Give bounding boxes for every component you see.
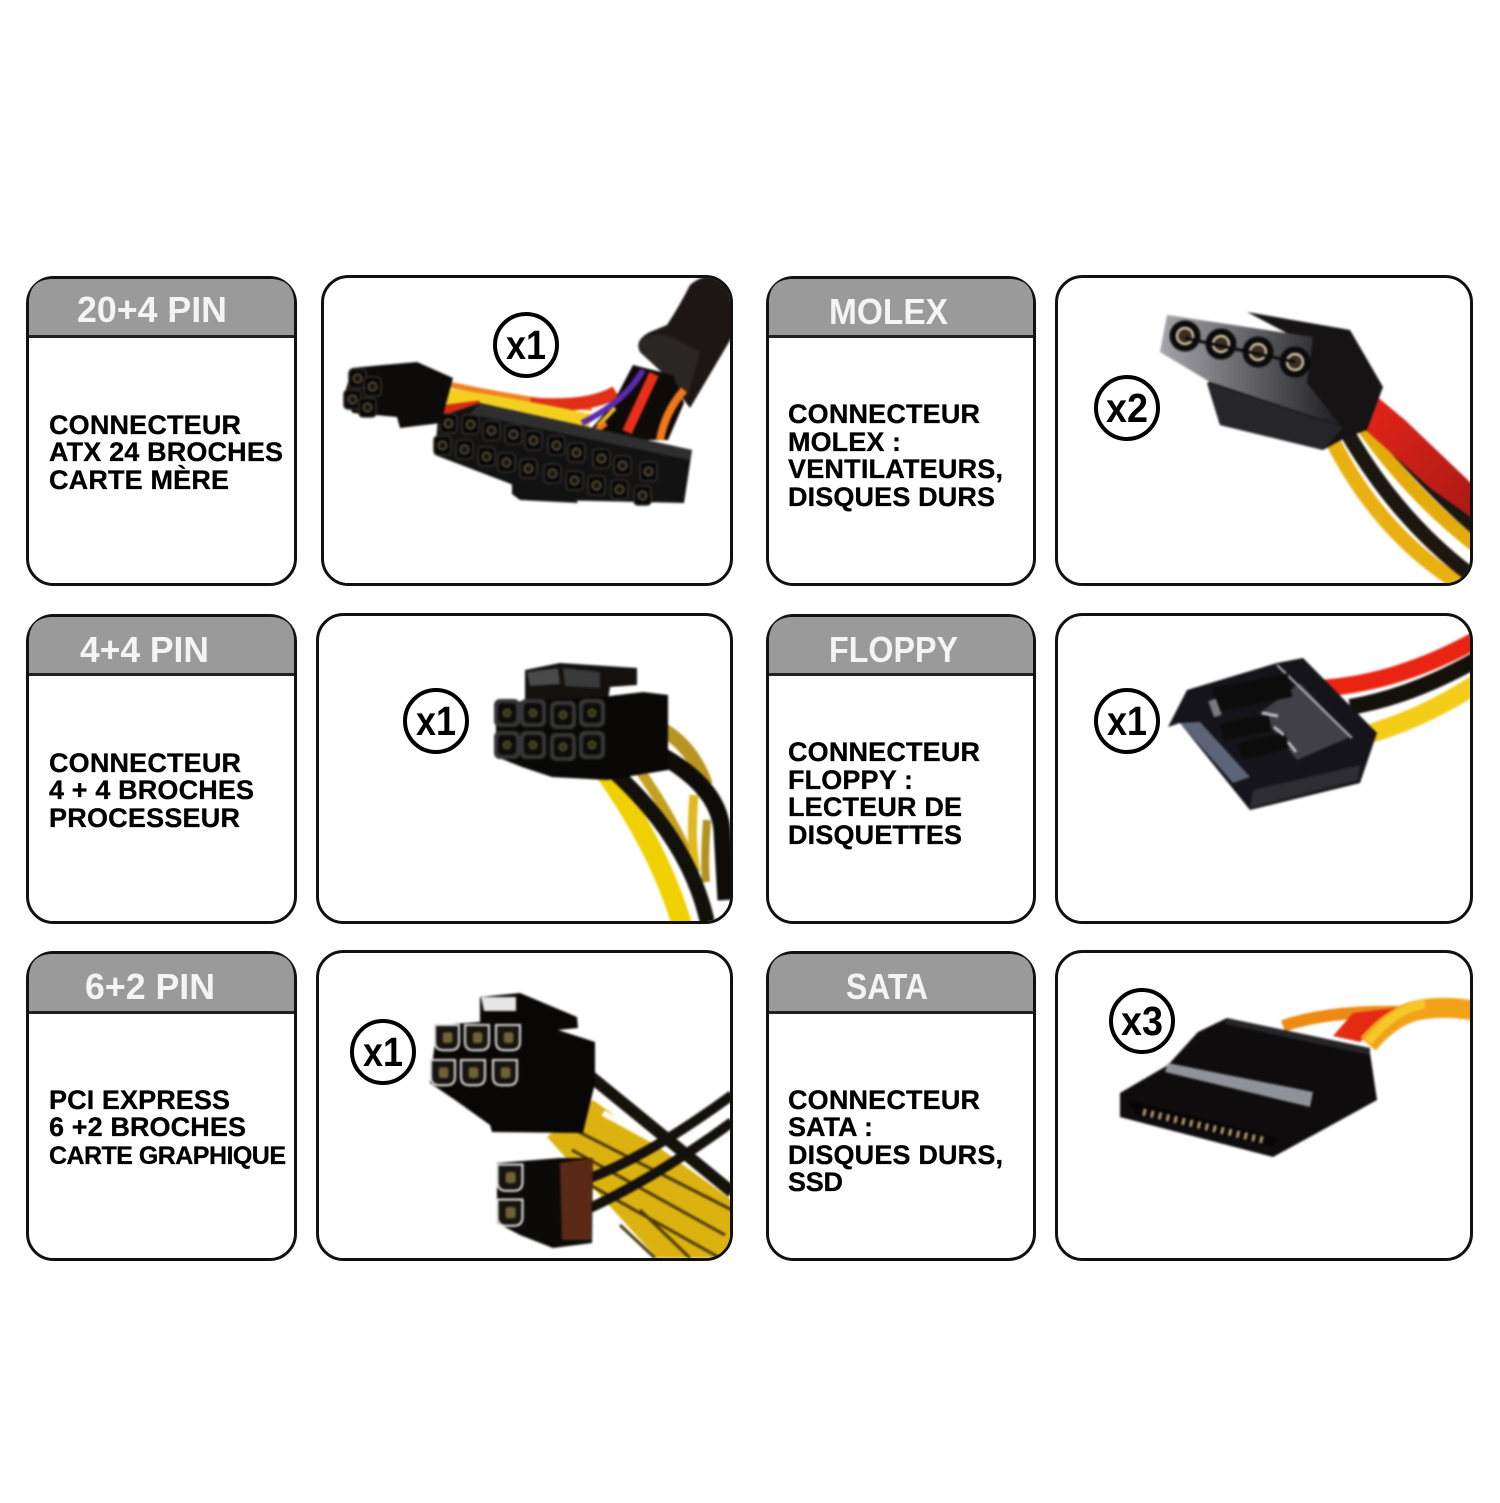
text: ATX 24 description: CONNECTEUR (49, 410, 241, 440)
panel: SATA connector photo (1056, 952, 1476, 1260)
text: SATA description: SSD (788, 1167, 843, 1197)
badge: x2: x2 (1106, 385, 1148, 431)
text: Molex description (788, 399, 1003, 512)
panel: Floppy label (768, 616, 1034, 922)
text: SATA description: CONNECTEUR (788, 1085, 980, 1115)
badge: x1: x1 (1107, 698, 1147, 744)
text: CPU description: 4 + 4 BROCHES (49, 775, 254, 805)
text: PCI Express description: PCI EXPRESS (49, 1085, 230, 1115)
photo: SATA connector (1120, 1004, 1476, 1157)
header: MOLEX: MOLEX (829, 291, 948, 332)
header: 4+4 PIN (29, 617, 294, 676)
text: Molex description: VENTILATEURS, (788, 454, 1003, 484)
badge: x3: x3 (1121, 998, 1163, 1044)
badge: x2 (1096, 377, 1158, 439)
badge: x1 (1096, 690, 1158, 752)
header: FLOPPY: FLOPPY (829, 629, 958, 670)
panel: Molex label (768, 278, 1034, 584)
text: Molex description: MOLEX : (788, 427, 901, 457)
header: MOLEX (769, 279, 1033, 338)
panel: Molex connector photo (1056, 276, 1475, 590)
panel: Floppy connector photo (1056, 614, 1476, 922)
panel: 4+4 pin label (28, 616, 296, 922)
text: PCI Express description: CARTE GRAPHIQUE (49, 1142, 286, 1170)
panel: 20+4 pin connector photo (322, 276, 732, 584)
text: SATA description: SATA : (788, 1112, 873, 1142)
header: FLOPPY (769, 617, 1033, 676)
photo: Molex connector (1160, 312, 1475, 590)
text: PCI Express description (49, 1085, 286, 1170)
badge: x3 (1111, 990, 1173, 1052)
header: 20+4 PIN: 20+4 PIN (77, 289, 227, 330)
text: Floppy description: FLOPPY : (788, 765, 913, 795)
photo: Floppy connector (1168, 640, 1476, 810)
text: Floppy description: DISQUETTES (788, 820, 962, 850)
text: Floppy description (788, 737, 980, 850)
panel: 6+2 pin connector photo (318, 952, 732, 1260)
badge: x1: x1 (363, 1029, 403, 1075)
header: 6+2 PIN: 6+2 PIN (85, 966, 215, 1007)
text: SATA description: DISQUES DURS, (788, 1140, 1003, 1170)
text: Floppy description: LECTEUR DE (788, 792, 962, 822)
badge: x1: x1 (416, 698, 456, 744)
text: ATX 24 description: CARTE MÈRE (49, 464, 229, 495)
text: Molex description: CONNECTEUR (788, 399, 980, 429)
text: SATA description (788, 1085, 1003, 1197)
panel: 4+4 pin connector photo (318, 614, 732, 925)
panel: 6+2 pin label (28, 952, 296, 1260)
panel: 20+4 pin label (28, 278, 296, 584)
panel: SATA label (768, 952, 1034, 1260)
photo: EPS 4+4 connector (494, 663, 726, 925)
text: Molex description: DISQUES DURS (788, 482, 995, 512)
header: 4+4 PIN: 4+4 PIN (80, 629, 209, 670)
header: 6+2 PIN (29, 954, 294, 1014)
badge: x1 (405, 690, 467, 752)
header: 20+4 PIN (29, 279, 294, 338)
photo: PCIe 6+2 connector (430, 993, 732, 1258)
text: CPU description: CONNECTEUR (49, 748, 241, 778)
text: ATX 24 description (49, 410, 283, 495)
text: PCI Express description: 6 +2 BROCHES (49, 1112, 246, 1142)
text: CPU description: PROCESSEUR (49, 803, 240, 833)
text: CPU description (49, 748, 254, 833)
badge: x1 (495, 314, 557, 376)
photo: ATX 24 pin connector (343, 276, 732, 505)
badge: x1: x1 (506, 322, 546, 368)
text: ATX 24 description: ATX 24 BROCHES (49, 437, 283, 467)
header: SATA (769, 954, 1033, 1014)
header: SATA: SATA (846, 966, 928, 1007)
text: Floppy description: CONNECTEUR (788, 737, 980, 767)
badge: x1 (352, 1021, 414, 1083)
